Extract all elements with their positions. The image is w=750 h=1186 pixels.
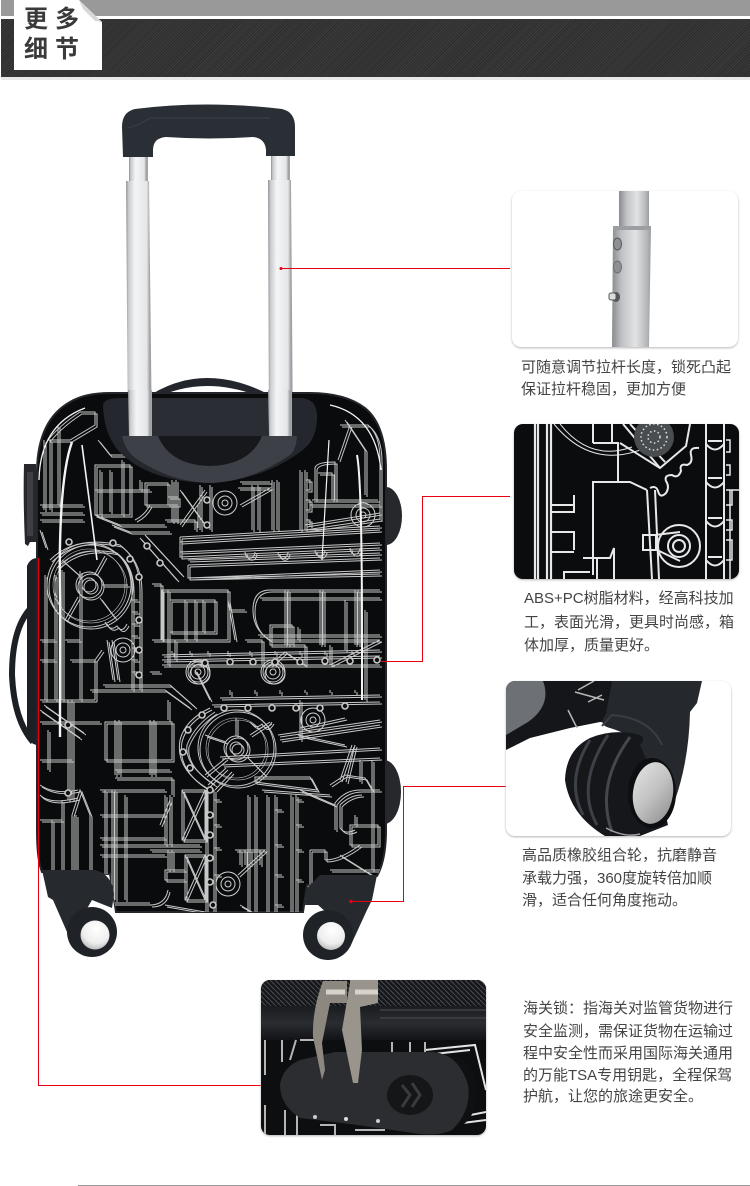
rubber wheel <box>565 732 668 836</box>
caption: trolley: 可随意调节拉杆长度，锁死凸起 <box>521 359 731 376</box>
panel: customs lock photo <box>261 980 486 1135</box>
caption: trolley: 保证拉杆稳固，更加方便 <box>521 381 686 398</box>
caption: customs lock: 的万能TSA专用钥匙，全程保驾 <box>523 1067 732 1084</box>
caption: customs lock: 安全监测，需保证货物在运输过 <box>523 1023 733 1040</box>
handle grip <box>122 104 295 157</box>
caption: wheel <box>522 847 717 909</box>
panel: shell material photo <box>514 424 739 579</box>
telescopic handle <box>122 104 295 440</box>
tube lower ends over mount <box>128 390 292 436</box>
left wheel <box>42 870 117 957</box>
outer tube <box>612 227 651 347</box>
caster housing <box>602 681 702 826</box>
caption: customs lock: 程中安全性而采用国际海关通用 <box>523 1045 733 1062</box>
printed lines <box>265 1040 486 1135</box>
blueprint second pass <box>42 414 382 914</box>
blueprint close-up <box>535 424 551 579</box>
suitcase illustration with callout lines <box>9 104 510 960</box>
metal clasps <box>313 981 347 1080</box>
lock knob <box>387 1075 433 1115</box>
lock back disc <box>433 1057 477 1127</box>
callout line: customs lock <box>38 558 261 1086</box>
heading: 更多细节: 细节 <box>24 36 86 63</box>
callout line: trolley <box>280 268 510 270</box>
luggage body <box>37 393 386 914</box>
carry handle <box>152 378 268 400</box>
adjustment holes <box>614 238 622 250</box>
caption: wheel: 承载力强，360度旋转倍加顺 <box>522 870 712 887</box>
blueprint pattern <box>40 412 380 912</box>
caption: trolley <box>521 359 731 398</box>
handle inner tubes <box>129 155 148 182</box>
caption: shell: ABS+PC树脂材料，经高科技加 <box>524 590 734 607</box>
caption: customs lock: 护航，让您的旅途更安全。 <box>523 1088 703 1105</box>
bottom divider <box>78 1185 750 1186</box>
handle outer tubes <box>126 181 152 440</box>
heading: 更多细节 <box>24 6 86 63</box>
side handle <box>12 558 38 745</box>
caption: wheel: 高品质橡胶组合轮，抗磨静音 <box>522 847 717 864</box>
caption: shell: 工，表面光滑，更具时尚感，箱 <box>524 614 734 631</box>
header dark hatched bar <box>1 19 750 77</box>
heading: 更多细节: 更多 <box>24 6 86 33</box>
lock pin <box>612 292 620 302</box>
wheel hub cap <box>628 758 676 828</box>
chain nodes <box>65 497 380 908</box>
side lock <box>24 464 36 546</box>
gloss highlights <box>39 405 381 737</box>
header grey strip <box>1 0 750 16</box>
header banner <box>1 0 750 80</box>
caption: shell <box>524 590 734 654</box>
header lower line <box>1 77 750 80</box>
heading tag shape <box>14 0 102 70</box>
caption: customs lock <box>523 1000 733 1105</box>
caption: wheel: 滑，适合任何角度拖动。 <box>522 892 687 909</box>
dial dots <box>313 1115 317 1119</box>
lock body <box>280 1052 469 1134</box>
speckled roller <box>634 417 674 457</box>
rear handle mount <box>103 398 317 483</box>
inner tube <box>619 191 649 229</box>
panel: trolley tube photo <box>512 191 738 347</box>
caption: shell: 体加厚，质量更好。 <box>524 637 659 654</box>
right wheel <box>303 875 377 960</box>
strap <box>261 1006 486 1040</box>
suitcase corner <box>506 681 640 750</box>
right bumpers <box>367 487 402 824</box>
caption: customs lock: 海关锁：指海关对监管货物进行 <box>523 1000 733 1017</box>
callout line: wheel <box>350 786 506 903</box>
zipper band <box>261 980 486 1006</box>
panel: wheel photo <box>506 681 731 836</box>
callout line: shell <box>381 496 514 662</box>
